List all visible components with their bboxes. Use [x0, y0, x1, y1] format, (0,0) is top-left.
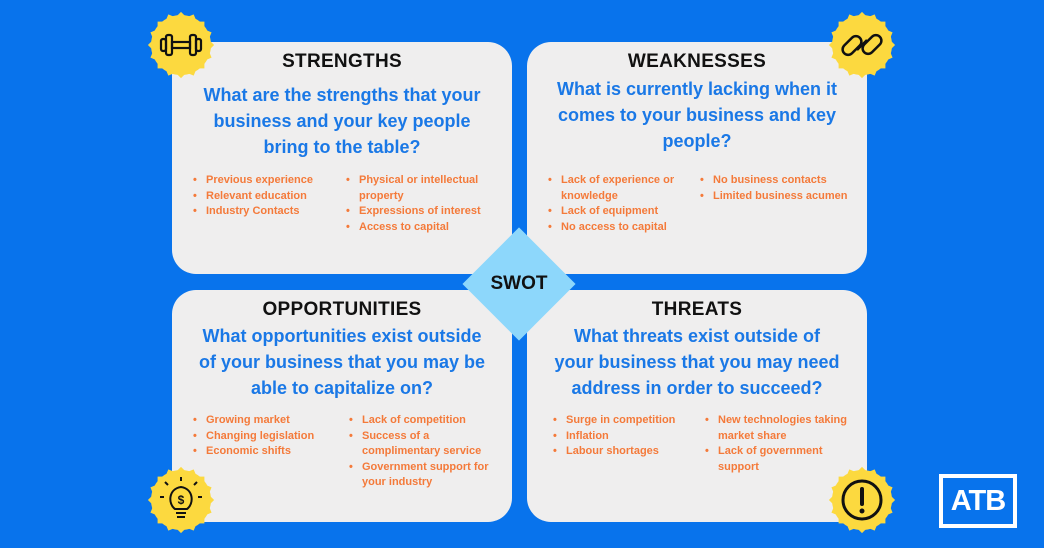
list: threats left: Surge in competition	[566, 414, 675, 426]
heading: strengths: STRENGTHS	[282, 51, 402, 72]
question: weaknesses: What is currently lacking when it	[557, 79, 837, 99]
heading: threats: THREATS	[652, 299, 742, 320]
question: threats: What threats exist outside of	[574, 326, 820, 346]
list: threats right: Lack of government support	[718, 445, 823, 472]
list: opportunities left	[193, 414, 314, 457]
icon: exclamation badge	[829, 467, 895, 533]
panel: opportunities	[172, 290, 512, 522]
list: threats right	[705, 414, 847, 472]
question: strengths: business and your key people	[213, 111, 471, 131]
question: weaknesses: people?	[662, 131, 732, 151]
list: threats right: New technologies taking market share	[718, 414, 847, 442]
panel: strengths	[172, 42, 512, 274]
logo: ATB: ATB	[951, 485, 1005, 517]
list: threats left	[553, 414, 675, 457]
question: opportunities: What opportunities exist outside	[202, 326, 482, 346]
list: strengths right: Access to capital	[359, 220, 449, 232]
question: strengths: What are the strengths that your	[203, 85, 481, 105]
list: opportunities right: Lack of competition	[362, 414, 466, 426]
list: threats left: Inflation	[566, 430, 609, 442]
list: opportunities left: Growing market	[206, 414, 290, 426]
question: opportunities: of your business that you may be	[199, 352, 485, 372]
list: strengths left	[193, 174, 313, 217]
question: strengths: bring to the table?	[264, 137, 420, 157]
list: opportunities right: Success of a complimentary service	[362, 430, 481, 457]
list: weaknesses left: No access to capital	[561, 220, 667, 232]
list: strengths right: Physical or intellectual property	[359, 174, 478, 202]
list: strengths left: Relevant education	[206, 190, 307, 202]
list: weaknesses right: Limited business acumen	[713, 190, 847, 202]
logo: ATB	[939, 474, 1017, 528]
list: weaknesses right	[700, 174, 847, 202]
question: threats: address in order to succeed?	[571, 378, 823, 398]
swot diamond: SWOT	[490, 273, 548, 294]
list: threats left: Labour shortages	[566, 445, 659, 457]
panel: threats	[527, 290, 867, 522]
icon: dumbbell badge	[148, 12, 214, 78]
list: weaknesses left: Lack of experience or knowledge	[561, 174, 674, 202]
question: weaknesses	[557, 79, 837, 151]
swot diamond	[462, 228, 576, 340]
list: opportunities left: Changing legislation	[206, 430, 314, 442]
list: strengths right: Expressions of interest	[359, 205, 481, 217]
question: threats: your business that you may need	[554, 352, 840, 372]
icon: lightbulb badge: $	[178, 493, 185, 507]
icon: chain badge	[829, 12, 895, 78]
panel: weaknesses	[527, 42, 867, 274]
list: strengths right	[346, 174, 481, 232]
list: weaknesses left	[548, 174, 674, 232]
list: weaknesses right: No business contacts	[713, 174, 827, 186]
list: strengths left: Previous experience	[206, 174, 313, 186]
question: strengths	[203, 85, 481, 157]
heading: opportunities: OPPORTUNITIES	[262, 299, 422, 320]
list: weaknesses left: Lack of equipment	[561, 205, 658, 217]
heading: weaknesses: WEAKNESSES	[628, 51, 766, 72]
question: weaknesses: comes to your business and key	[558, 105, 836, 125]
question: threats	[554, 326, 840, 398]
question: opportunities: able to capitalize on?	[251, 378, 433, 398]
list: strengths left: Industry Contacts	[206, 205, 300, 217]
icon: lightbulb badge	[148, 467, 214, 533]
list: opportunities right	[349, 414, 489, 488]
question: opportunities	[199, 326, 485, 398]
list: opportunities left: Economic shifts	[206, 445, 291, 457]
list: opportunities right: Government support for your industry	[362, 460, 489, 488]
